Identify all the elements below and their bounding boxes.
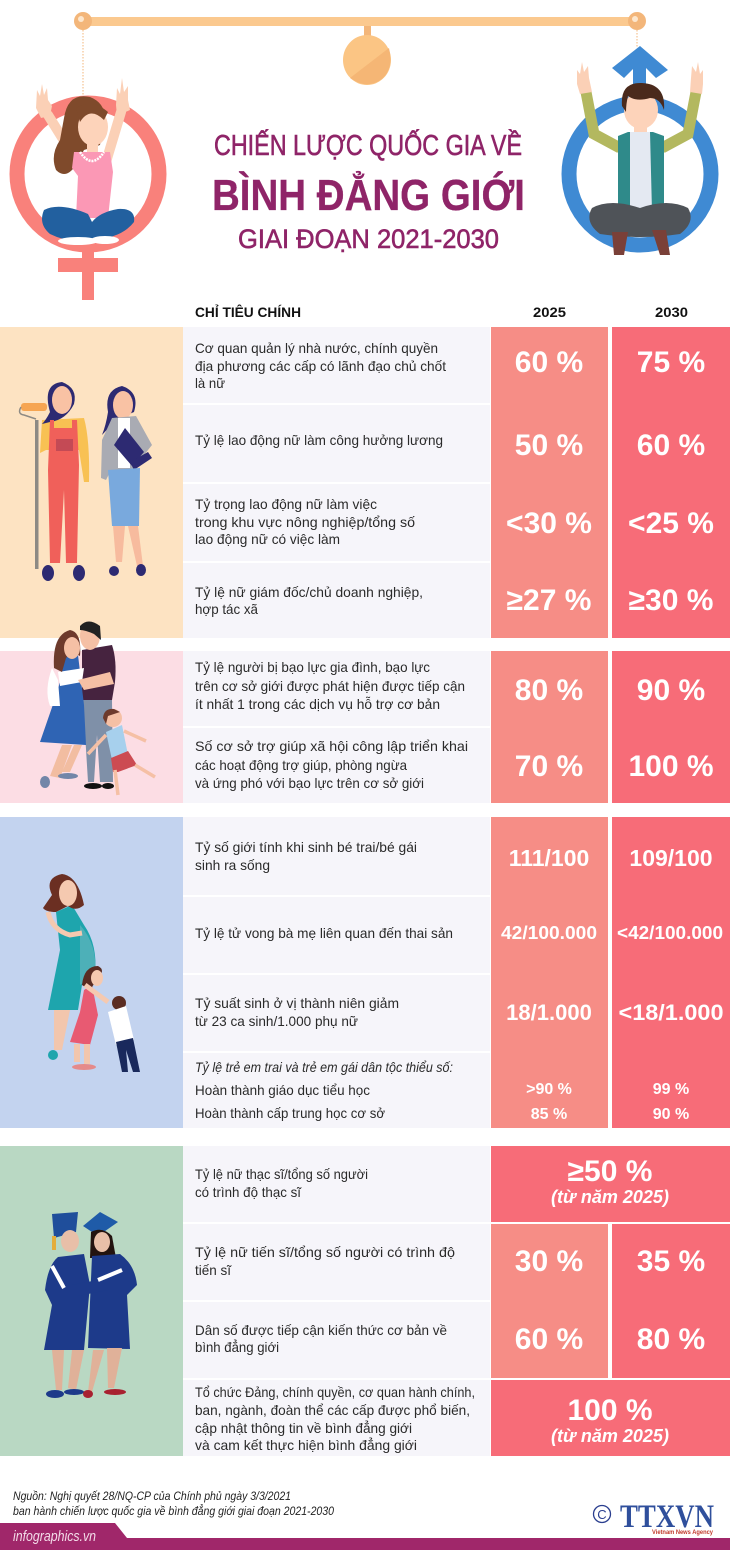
text: employment indicators: Cơ quan quản lý nhà nước, chính quyền: [195, 340, 438, 356]
icon: women workers: [20, 382, 152, 581]
text: employment indicators: hợp tác xã: [195, 601, 258, 617]
values: violence: 70 %: [515, 750, 583, 783]
values: employment: 60 %: [637, 429, 705, 462]
values: education: ≥50 %: [568, 1155, 652, 1188]
values: employment: 75 %: [637, 346, 705, 379]
source note: ban hành chiến lược quốc gia về bình đẳng giới giai đoạn 2021-2030: [13, 1503, 334, 1518]
table header: 2025: [533, 304, 566, 320]
values: violence: 80 %: [515, 674, 583, 707]
logo: TTXVN: C: [597, 1507, 607, 1522]
text: education indicators: Tổ chức Đảng, chính quyền, cơ quan hành chính,: [195, 1384, 475, 1400]
text: health indicators: sinh ra sống: [195, 857, 270, 873]
values: health: 111/100: [509, 845, 589, 871]
footer bar: [0, 1523, 730, 1550]
text: education indicators: Tỷ lệ nữ tiến sĩ/tổng số người có trình độ: [195, 1244, 455, 1260]
text: health indicators: Tỷ suất sinh ở vị thành niên giảm: [195, 995, 399, 1011]
title: [212, 128, 525, 254]
values: education: 35 %: [637, 1245, 705, 1278]
title: GIAI ĐOẠN 2021-2030: [238, 224, 499, 254]
values: health: >90 %: [526, 1081, 572, 1098]
text: education indicators: [195, 1166, 475, 1453]
values: health: 99 %: [653, 1081, 689, 1098]
text: violence indicators: các hoạt động trợ giúp, phòng ngừa: [195, 757, 407, 773]
title: CHIẾN LƯỢC QUỐC GIA VỀ: [214, 128, 522, 162]
icon: family: [40, 622, 155, 795]
values: health: 18/1.000: [506, 1000, 592, 1025]
footer bar: infographics.vn: [13, 1528, 96, 1545]
text: health indicators: [195, 839, 453, 1121]
text: employment indicators: là nữ: [195, 375, 225, 391]
values: employment: [506, 346, 714, 617]
values: violence: 100 %: [628, 750, 714, 783]
logo: TTXVN: Vietnam News Agency: [652, 1530, 714, 1536]
text: violence indicators: Số cơ sở trợ giúp xã hội công lập triển khai: [195, 738, 468, 754]
text: violence indicators: trên cơ sở giới được phát hiện được tiếp cận: [195, 678, 465, 694]
values: education: 30 %: [515, 1245, 583, 1278]
text: employment indicators: địa phương các cấp có lãnh đạo chủ chốt: [195, 358, 446, 374]
text: violence indicators: Tỷ lệ người bị bạo lực gia đình, bạo lực: [195, 659, 430, 675]
text: education indicators: cập nhật thông tin về bình đẳng giới: [195, 1419, 412, 1436]
source note: Nguồn: Nghị quyết 28/NQ-CP của Chính phủ ngày 3/3/2021: [13, 1489, 291, 1503]
values: health: [501, 845, 724, 1123]
text: education indicators: ban, ngành, đoàn thể các cấp được phổ biến,: [195, 1402, 470, 1418]
icon: graduates: [44, 1212, 137, 1398]
values: employment: 50 %: [515, 429, 583, 462]
values: violence: 90 %: [637, 674, 705, 707]
panel: health: [0, 817, 730, 1128]
text: education indicators: bình đẳng giới: [195, 1338, 279, 1355]
text: employment indicators: Tỷ lệ lao động nữ làm công hưởng lương: [195, 432, 443, 448]
values: employment: ≥30 %: [629, 584, 713, 617]
icon: woman in female symbol: [17, 78, 159, 300]
text: employment indicators: [195, 340, 446, 617]
values: education: 100 %: [567, 1394, 653, 1427]
values: employment: <25 %: [628, 507, 714, 540]
values: education: 80 %: [637, 1323, 705, 1356]
values: employment: ≥27 %: [507, 584, 591, 617]
icon: balance scale: [74, 12, 646, 100]
text: employment indicators: lao động nữ có việc làm: [195, 531, 340, 547]
table header: 2030: [655, 304, 688, 320]
text: health indicators: Tỷ số giới tính khi sinh bé trai/bé gái: [195, 839, 417, 855]
icon: man in male symbol: [569, 46, 711, 255]
icon: pregnant mother with children: [43, 874, 140, 1072]
text: education indicators: Tỷ lệ nữ thạc sĩ/tổng số người: [195, 1166, 368, 1182]
text: health indicators: Hoàn thành giáo dục tiểu học: [195, 1082, 370, 1098]
table header: [195, 303, 688, 320]
text: education indicators: tiến sĩ: [195, 1262, 232, 1278]
source note: [13, 1489, 334, 1518]
text: health indicators: Tỷ lệ trẻ em trai và trẻ em gái dân tộc thiểu số:: [195, 1059, 453, 1075]
values: health: 42/100.000: [501, 923, 597, 943]
panel: education: [0, 1146, 730, 1456]
logo: TTXVN: [594, 1499, 714, 1536]
values: health: 109/100: [629, 845, 713, 871]
values: health: 85 %: [531, 1106, 567, 1123]
text: violence indicators: ít nhất 1 trong các dịch vụ hỗ trợ cơ bản: [195, 696, 440, 712]
text: health indicators: Hoàn thành cấp trung học cơ sở: [195, 1105, 385, 1121]
text: employment indicators: Tỷ lệ nữ giám đốc/chủ doanh nghiệp,: [195, 584, 423, 600]
values: education: 60 %: [515, 1323, 583, 1356]
text: violence indicators: [195, 659, 468, 791]
values: employment: 60 %: [515, 346, 583, 379]
values: health: <18/1.000: [618, 1000, 724, 1025]
values: health: 90 %: [653, 1106, 689, 1123]
text: employment indicators: Tỷ trọng lao động nữ làm việc: [195, 496, 377, 512]
table header: CHỈ TIÊU CHÍNH: [195, 303, 301, 320]
values: employment: <30 %: [506, 507, 592, 540]
title: BÌNH ĐẲNG GIỚI: [212, 169, 525, 220]
text: health indicators: từ 23 ca sinh/1.000 phụ nữ: [195, 1013, 358, 1029]
text: health indicators: Tỷ lệ tử vong bà mẹ liên quan đến thai sản: [195, 925, 453, 941]
panel: employment: [0, 327, 730, 638]
values: education: (từ năm 2025): [551, 1426, 669, 1446]
text: education indicators: có trình độ thạc sĩ: [195, 1184, 302, 1200]
text: employment indicators: trong khu vực nông nghiệp/tổng số: [195, 514, 415, 530]
text: education indicators: Dân số được tiếp cận kiến thức cơ bản về: [195, 1322, 447, 1338]
values: education: (từ năm 2025): [551, 1187, 669, 1207]
values: health: <42/100.000: [617, 923, 723, 943]
text: education indicators: và cam kết thực hiện bình đẳng giới: [195, 1436, 417, 1453]
panel: violence support: [0, 622, 730, 803]
values: violence: [515, 674, 714, 783]
values: education: [515, 1155, 705, 1446]
text: violence indicators: và ứng phó với bạo lực trên cơ sở giới: [195, 775, 424, 791]
